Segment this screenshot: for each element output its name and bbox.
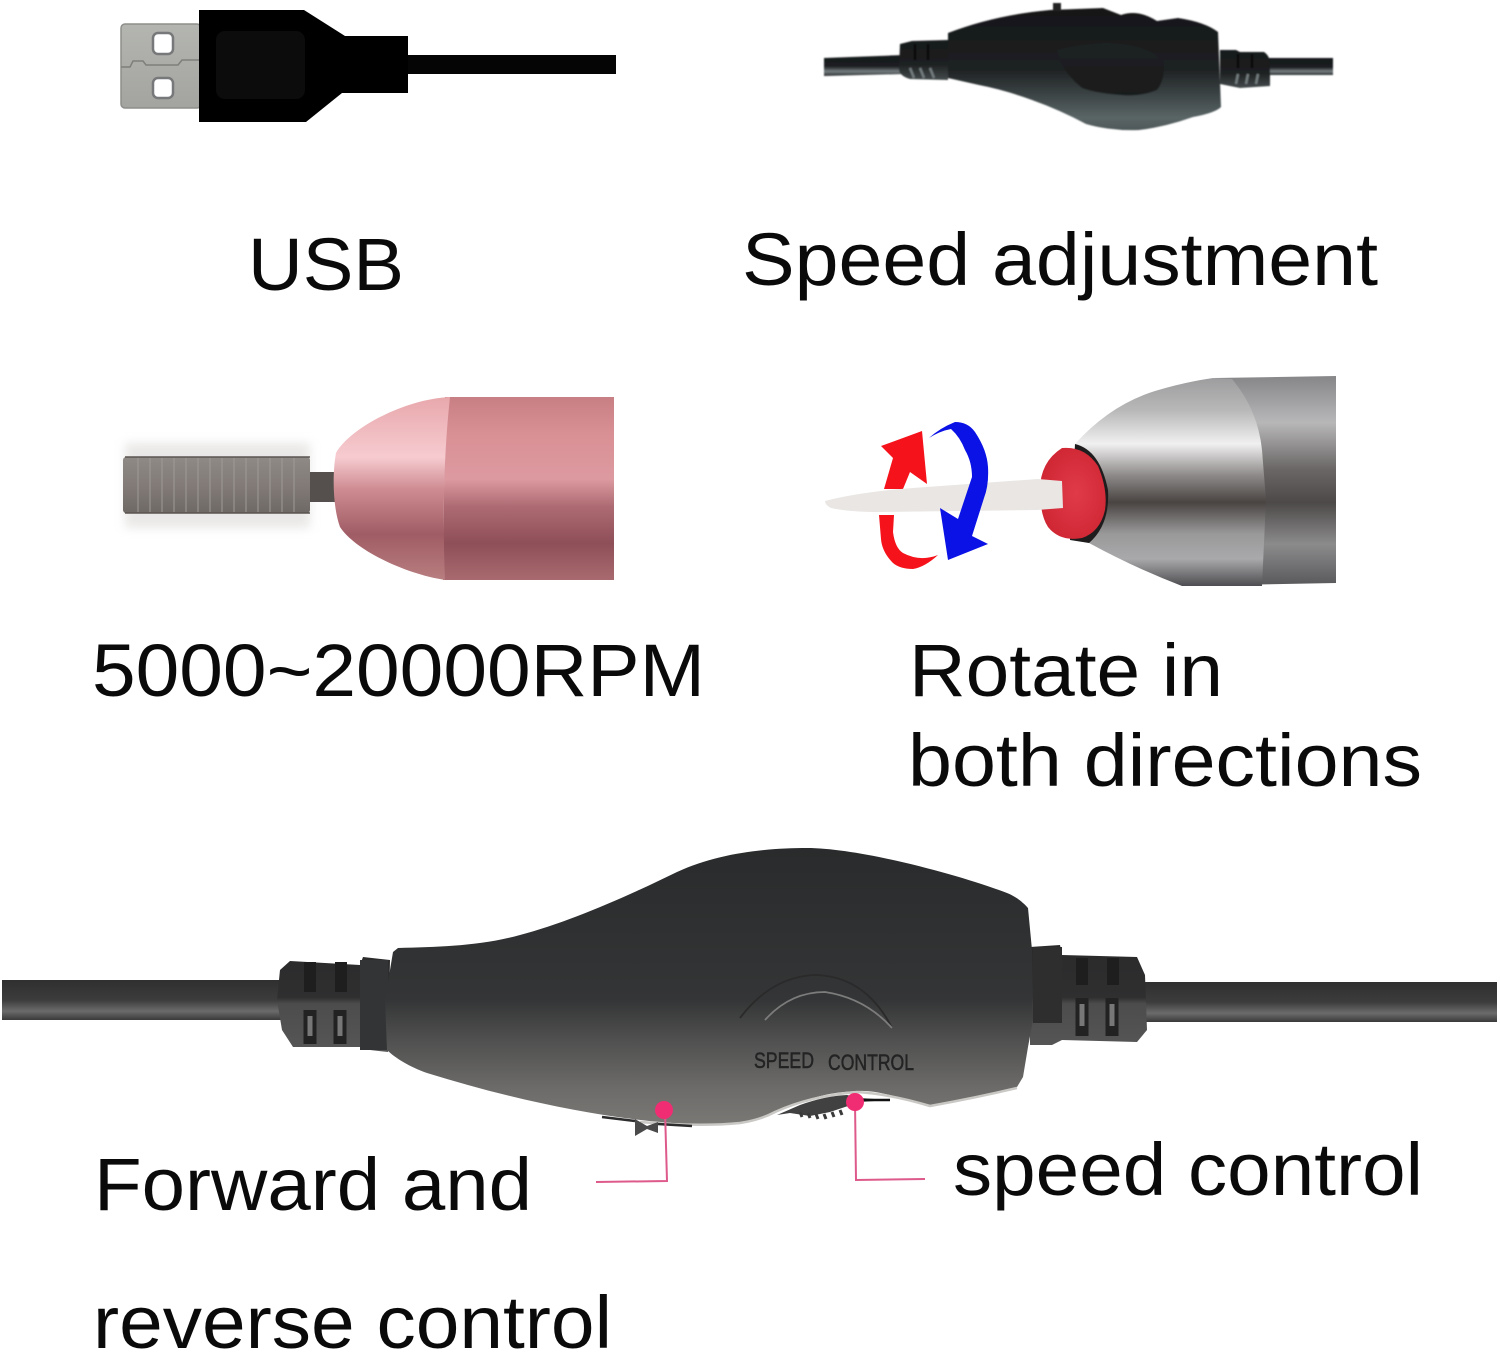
- pink head: [334, 397, 614, 580]
- ceramic bit: [825, 479, 1063, 512]
- body lower highlight: [640, 1088, 1017, 1125]
- label: Forward and reverse control: Forward and: [94, 1143, 532, 1226]
- silver head: [1070, 376, 1336, 586]
- label: 5000~20000RPM: 5000~20000RPM: [92, 629, 705, 712]
- direction switch: [602, 1117, 692, 1136]
- arrow: blue rotation: [929, 422, 988, 560]
- USB metal connector: [121, 24, 201, 108]
- embossed label: SPEED CONTROL: [754, 1048, 914, 1075]
- label: speed control: speed control: [953, 1128, 1423, 1211]
- embossed speed arc: [740, 975, 892, 1028]
- embossed label: SPEED CONTROL: CONTROL: [828, 1050, 914, 1075]
- icon: silver drill head rotating both directions: [825, 376, 1336, 586]
- icon: enlarged speed controller: [2, 848, 1497, 1136]
- controller body: [385, 848, 1033, 1124]
- speed wheel: [777, 1095, 890, 1119]
- label: Rotate in both directions: both directions: [908, 719, 1422, 802]
- sanding bit: [123, 443, 336, 528]
- icon: inline speed controller: [824, 3, 1333, 130]
- red collar: [1040, 448, 1106, 539]
- callout: forward and reverse pointer: [596, 1101, 673, 1182]
- icon: USB plug: [121, 10, 616, 122]
- label: Rotate in both directions: Rotate in: [909, 629, 1223, 712]
- arrow: red rotation: [879, 431, 938, 569]
- icon: pink drill head with bit: [123, 397, 614, 580]
- USB plug housing and cable: [199, 10, 616, 122]
- label: Rotate in both directions: [908, 629, 1422, 802]
- cables: [2, 980, 1497, 1022]
- label: USB: USB: [248, 223, 404, 306]
- callout: speed control pointer: [846, 1093, 925, 1180]
- label: Forward and reverse control: [93, 1143, 612, 1354]
- strain relief collars: [277, 945, 1147, 1052]
- label: Speed adjustment: Speed adjustment: [742, 218, 1378, 301]
- embossed label: SPEED CONTROL: SPEED: [754, 1048, 814, 1073]
